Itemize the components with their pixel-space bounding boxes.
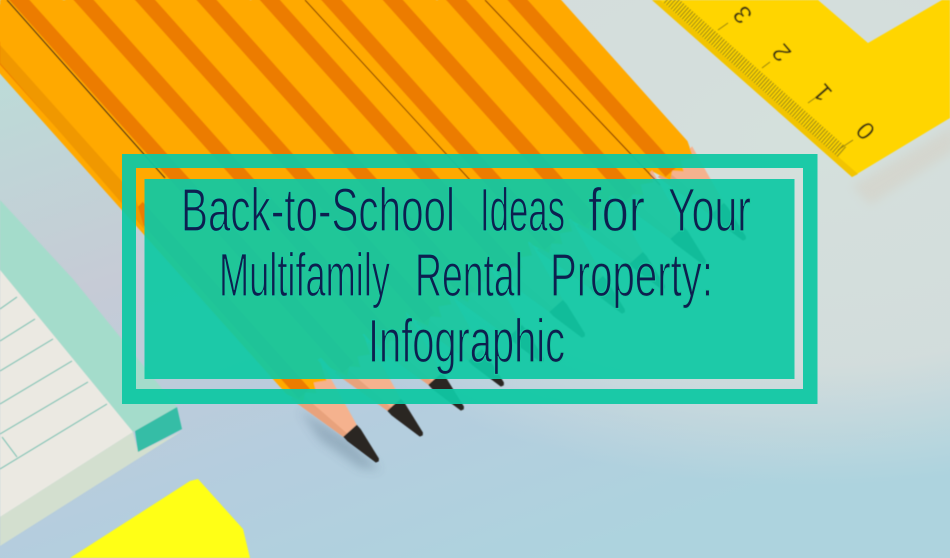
- title: Rental: [415, 241, 523, 309]
- ruler numbers: 1: [808, 78, 838, 107]
- banner frame: [122, 154, 818, 404]
- ruler shadow: [852, 125, 950, 205]
- title: for: [588, 176, 645, 244]
- banner panel: [144, 179, 794, 379]
- ruler numbers: 0: [851, 116, 881, 145]
- notebook page edge: [0, 200, 177, 432]
- title: Back-to-School: [181, 176, 455, 244]
- ruler long ticks: [718, 23, 853, 150]
- leftmost pencil: [0, 0, 165, 210]
- ruler numbers: 3: [728, 0, 758, 29]
- ruler: [652, 0, 950, 177]
- leftmost pencil shaded facet: [0, 45, 145, 230]
- title: Your: [668, 176, 751, 244]
- pencils: [0, 0, 762, 477]
- title: [181, 176, 751, 375]
- pencil body backing: [0, 0, 688, 380]
- title: Property:: [550, 241, 713, 309]
- ruler numbers: 2: [767, 38, 797, 67]
- notebook: [0, 200, 182, 546]
- ruler tick marks: [668, 0, 843, 153]
- title: Multifamily: [219, 241, 390, 309]
- notebook side: [0, 431, 182, 546]
- ruler numbers: [728, 0, 881, 145]
- highlighter: [70, 479, 250, 558]
- shadow under pencil tips: [300, 410, 380, 470]
- title: Infographic: [368, 307, 565, 375]
- notebook top page: [0, 270, 133, 517]
- notebook tab: [135, 407, 182, 452]
- notebook ruled lines: [0, 297, 107, 469]
- title: Ideas: [480, 176, 565, 244]
